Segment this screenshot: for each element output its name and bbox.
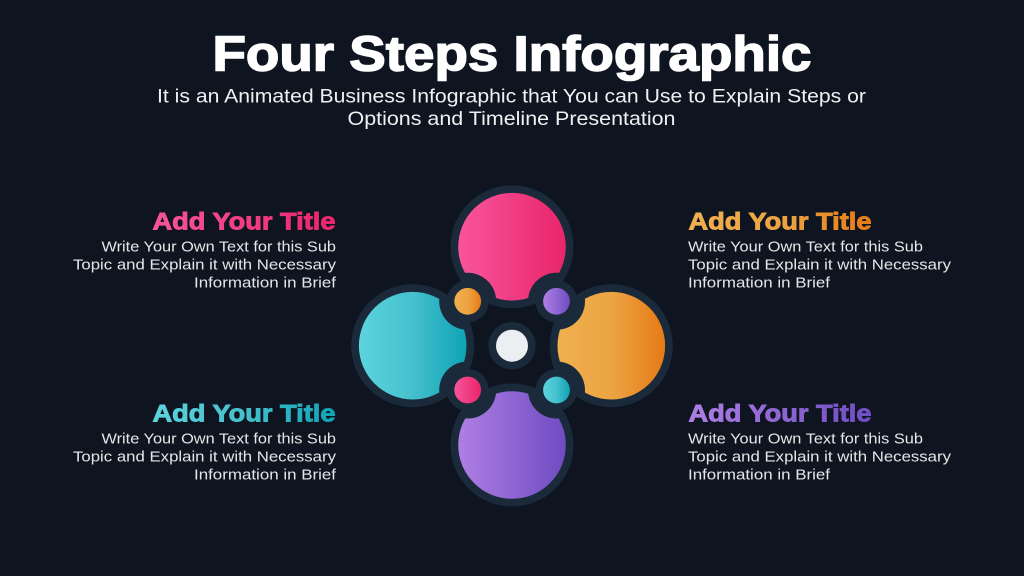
petal cut-outs	[439, 273, 585, 418]
body: purple: Topic and Explain it with Necessary	[688, 450, 952, 466]
center dot	[488, 322, 536, 369]
body: pink: Information in Brief	[194, 276, 337, 292]
body: teal	[73, 432, 337, 484]
petal: orange	[550, 284, 673, 407]
heading: teal: Add Your Title	[152, 400, 336, 427]
node: pink	[447, 369, 489, 411]
subtitle: It is an Animated Business Infographic that You can Use to Explain Steps or	[157, 86, 867, 108]
text block: teal step	[73, 400, 337, 484]
body: orange: Write Your Own Text for this Sub	[688, 240, 923, 256]
text block: purple step	[688, 400, 952, 484]
body: teal: Information in Brief	[194, 468, 337, 484]
petal: pink	[450, 185, 574, 308]
title: Four Steps Infographic	[212, 27, 812, 82]
subtitle	[157, 86, 867, 130]
heading: purple: Add Your Title	[688, 400, 872, 427]
body: purple: Write Your Own Text for this Sub	[688, 432, 923, 448]
body: orange: Topic and Explain it with Necessary	[688, 258, 952, 274]
node: orange	[447, 280, 489, 322]
infographic canvas	[73, 34, 951, 506]
text block: orange step	[688, 208, 952, 292]
body: pink: Topic and Explain it with Necessary	[73, 258, 337, 274]
petal: purple	[450, 384, 574, 506]
body: orange	[688, 240, 952, 292]
text block: pink step	[73, 208, 337, 292]
petal: teal	[351, 284, 474, 407]
four-petal diagram	[351, 185, 673, 506]
body: orange: Information in Brief	[688, 276, 831, 292]
body: pink	[73, 240, 337, 292]
heading: pink: Add Your Title	[152, 208, 336, 235]
body: teal: Write Your Own Text for this Sub	[102, 432, 336, 448]
node: teal	[536, 369, 578, 411]
body: purple: Information in Brief	[688, 468, 831, 484]
body: purple	[688, 432, 952, 484]
heading: orange: Add Your Title	[688, 208, 872, 235]
node: purple	[536, 280, 578, 322]
body: pink: Write Your Own Text for this Sub	[102, 240, 336, 256]
body: teal: Topic and Explain it with Necessary	[73, 450, 337, 466]
subtitle: Options and Timeline Presentation	[348, 108, 676, 130]
